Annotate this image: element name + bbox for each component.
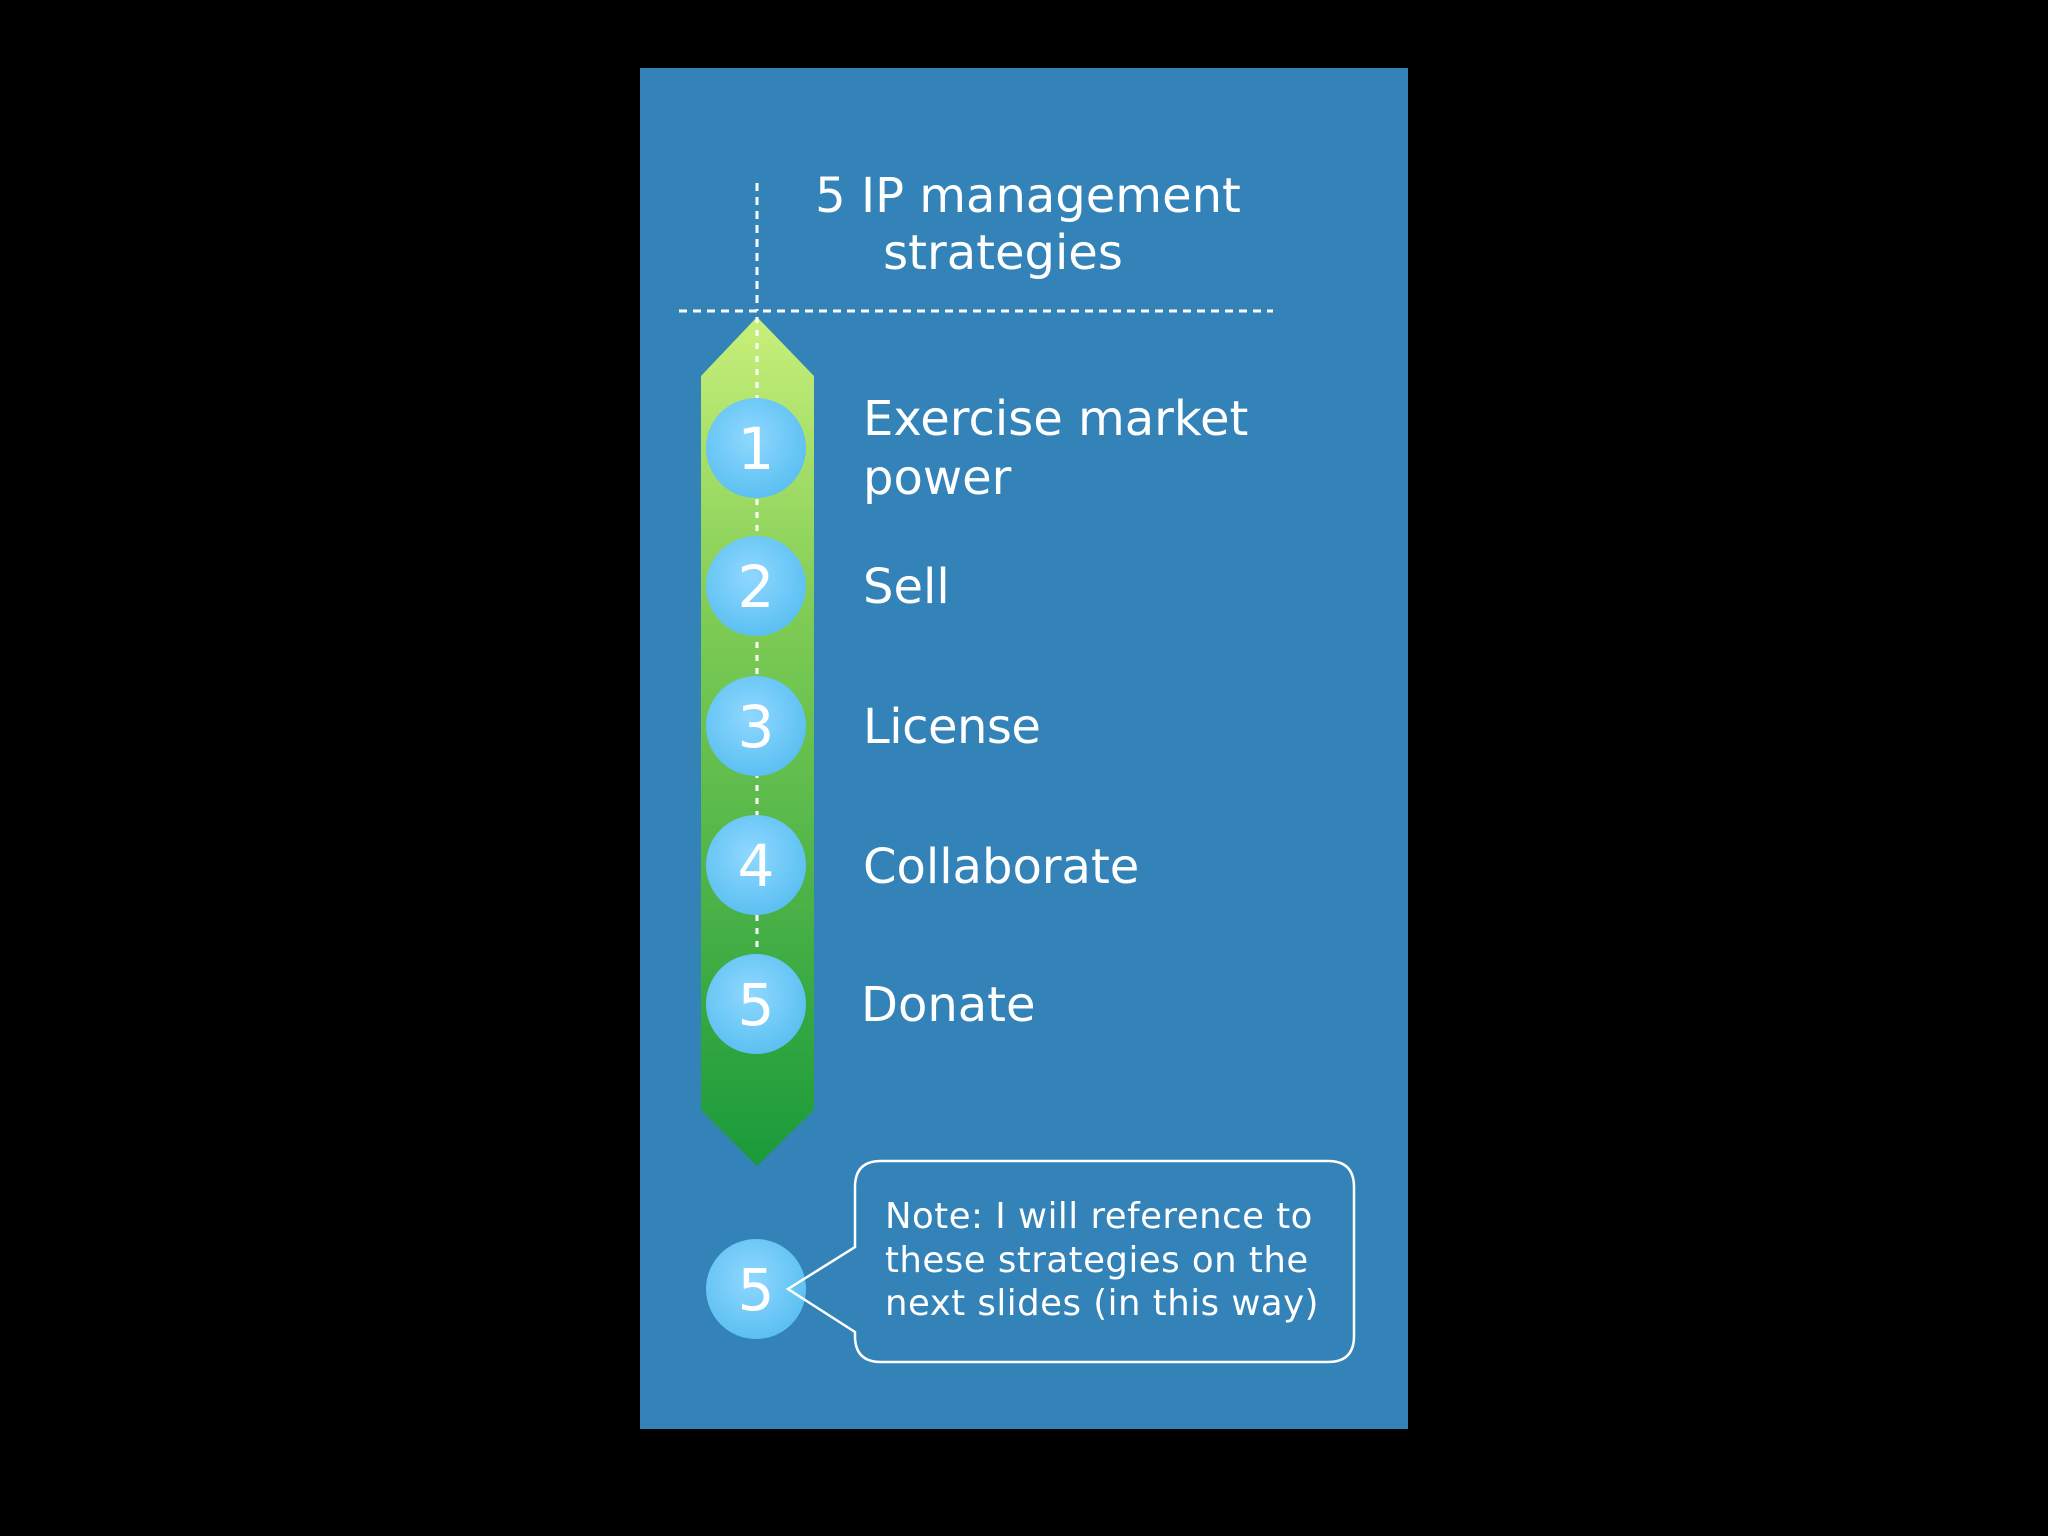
title: 5 IP management xyxy=(815,168,1241,224)
strategy labels: Sell xyxy=(863,559,950,615)
numbered circles: 3 xyxy=(738,693,774,761)
numbered circles: 5 xyxy=(738,971,774,1039)
strategy labels: Collaborate xyxy=(863,839,1139,895)
title: strategies xyxy=(883,225,1123,281)
strategy labels: License xyxy=(863,699,1040,755)
bottom reference circle: 5 xyxy=(738,1256,774,1324)
dotted guide lines xyxy=(679,183,1273,311)
bottom reference circle xyxy=(706,1239,806,1339)
strategy labels: Donate xyxy=(861,977,1036,1033)
callout xyxy=(788,1161,1354,1362)
title xyxy=(815,168,1241,281)
numbered circles: 2 xyxy=(738,553,774,621)
strategy labels xyxy=(861,391,1248,1033)
arrow: vertical gradient xyxy=(701,317,814,1166)
callout: Note: I will reference to xyxy=(885,1196,1313,1237)
panel: blue card xyxy=(640,68,1408,1429)
numbered circles: 1 xyxy=(738,415,774,483)
callout: next slides (in this way) xyxy=(885,1283,1319,1324)
numbered circles: 4 xyxy=(738,832,774,900)
numbered circles xyxy=(706,398,806,1054)
strategy labels: Exercise market xyxy=(863,391,1248,447)
strategy labels: power xyxy=(863,450,1012,506)
callout: these strategies on the xyxy=(885,1240,1309,1281)
